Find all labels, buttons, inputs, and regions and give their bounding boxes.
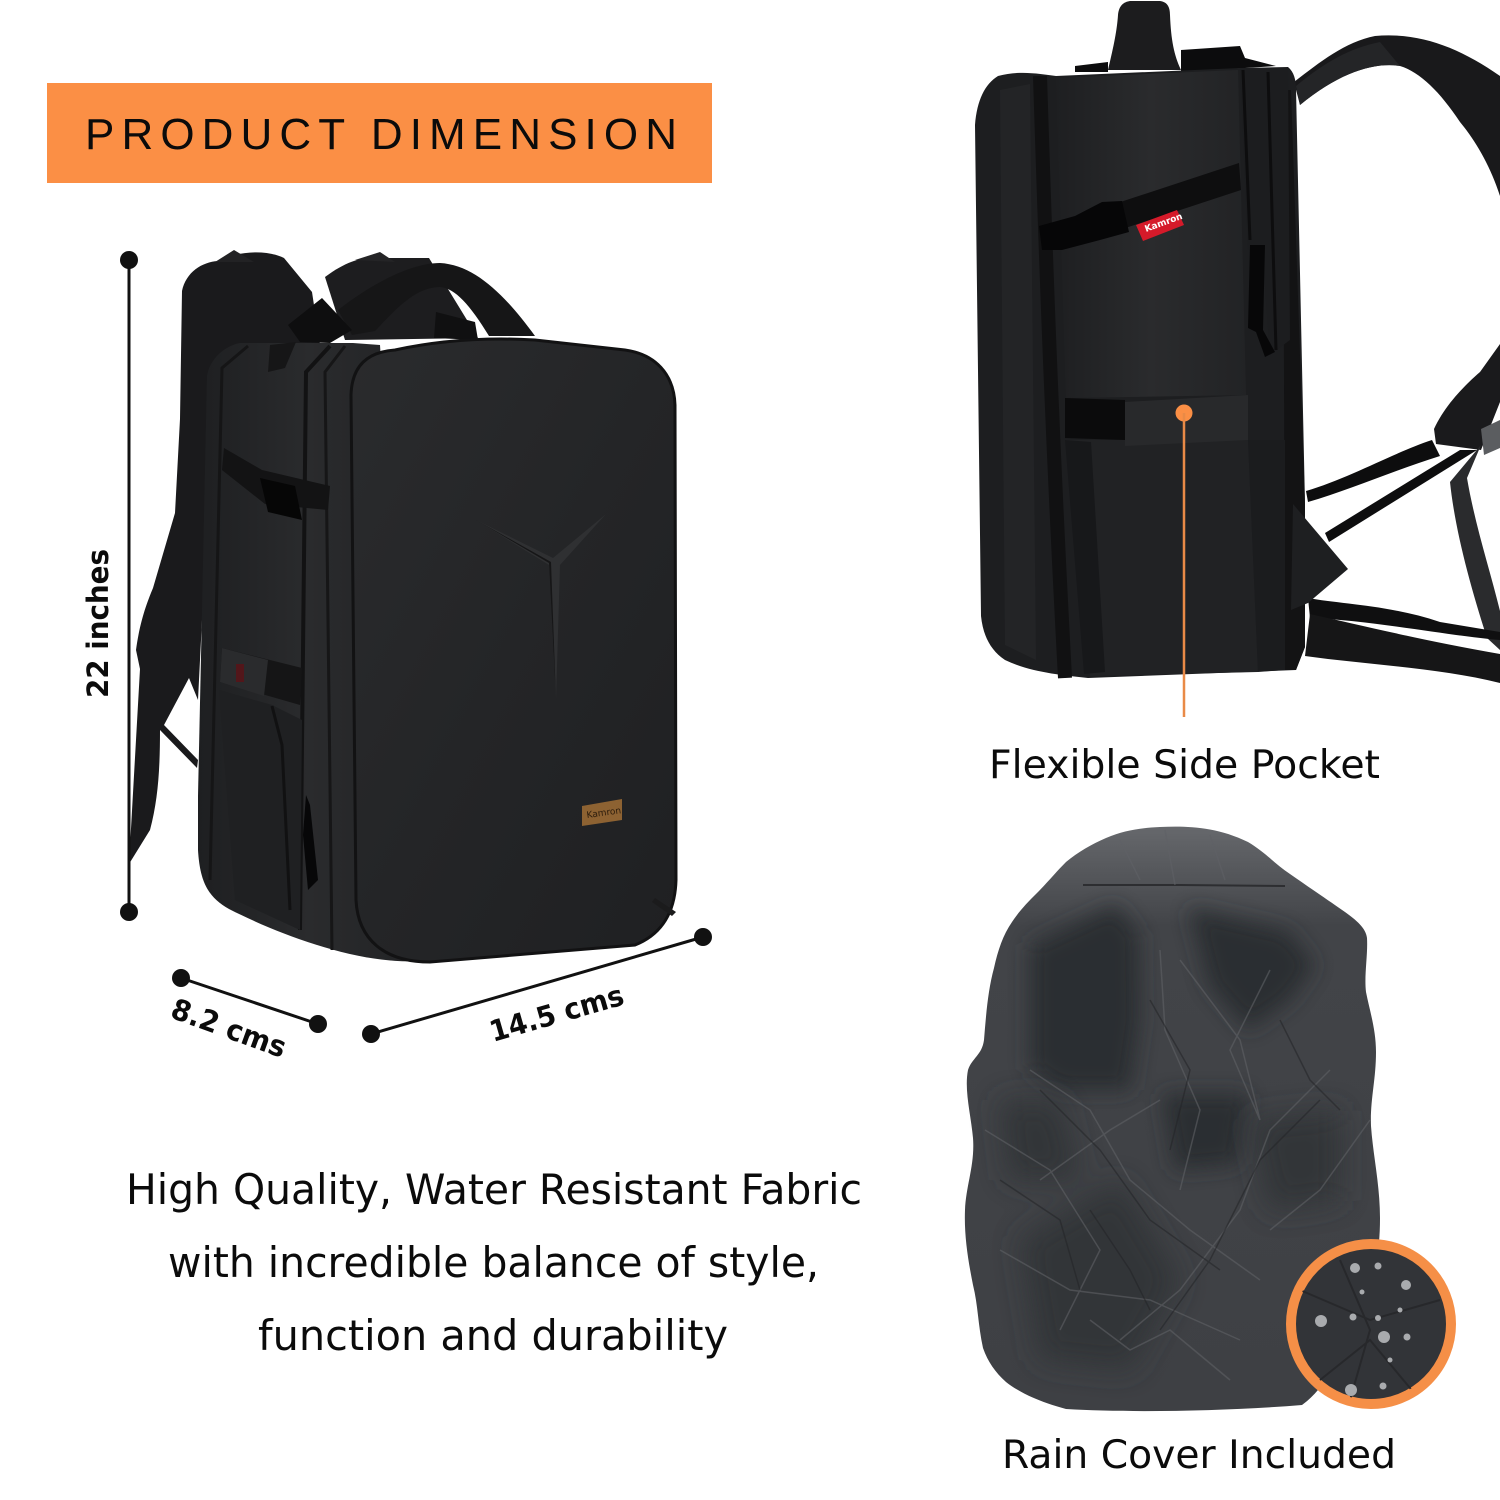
side pocket strap — [220, 648, 302, 705]
seam — [1083, 885, 1285, 886]
dimension: depth 8.2 cms: 8.2 cms — [167, 992, 291, 1065]
red label — [1136, 210, 1184, 241]
label: rain cover included: Rain Cover Included — [1002, 1433, 1396, 1478]
dimension: height 22 inches: 22 inches — [81, 549, 115, 698]
corner tab — [1291, 504, 1348, 610]
description text: High Quality, Water Resistant Fabric — [126, 1165, 862, 1214]
buckle strap — [1090, 163, 1241, 238]
front shell highlight — [1000, 84, 1036, 660]
right seam band — [1240, 68, 1290, 355]
description text — [126, 1165, 862, 1360]
red label: Kamron — [1144, 212, 1184, 235]
side pocket — [219, 690, 302, 930]
dimension: depth 8.2 cms — [167, 969, 327, 1065]
dimension: width 14.5 cms: 14.5 cms — [486, 978, 628, 1049]
pointer: flexible side pocket — [1176, 404, 1192, 717]
dimension: height 22 inches — [81, 251, 138, 921]
loop strap — [1450, 445, 1500, 650]
brand patch: Kamron — [586, 806, 622, 821]
thin straps — [1306, 440, 1440, 502]
bottom straps — [1308, 598, 1500, 640]
description text: with incredible balance of style, — [168, 1238, 819, 1287]
title banner — [47, 83, 712, 183]
buckle — [288, 298, 352, 343]
side buckle strap — [222, 448, 330, 510]
inset: water droplets on fabric — [1291, 1244, 1451, 1404]
brand patch — [582, 799, 622, 826]
hard shell front — [351, 339, 676, 962]
top tab — [268, 342, 296, 372]
rain cover photo — [965, 827, 1380, 1411]
carry handle — [1108, 1, 1181, 70]
description text: function and durability — [258, 1311, 728, 1360]
wrinkles — [985, 830, 1370, 1380]
back strap pad — [325, 258, 478, 340]
label: flexible side pocket: Flexible Side Pocket — [989, 743, 1380, 788]
side view backpack photo — [975, 1, 1500, 683]
fabric panel — [1056, 70, 1246, 398]
side body — [198, 343, 420, 961]
carry handle — [338, 263, 535, 336]
upper shoulder strap — [1294, 35, 1500, 196]
dimension: width 14.5 cms — [362, 928, 712, 1049]
back panel — [1283, 90, 1305, 670]
zipper pull — [1248, 245, 1275, 357]
dark lobes — [1030, 905, 1315, 1170]
title banner: PRODUCT DIMENSION — [85, 110, 677, 159]
Y emboss — [476, 514, 606, 700]
main body — [975, 67, 1305, 678]
pocket strap — [1065, 398, 1125, 440]
side pocket — [1065, 440, 1258, 676]
left shoulder strap — [129, 252, 320, 864]
shoulder pad — [1434, 344, 1500, 450]
main backpack photo — [129, 250, 676, 962]
zipper — [303, 795, 318, 890]
